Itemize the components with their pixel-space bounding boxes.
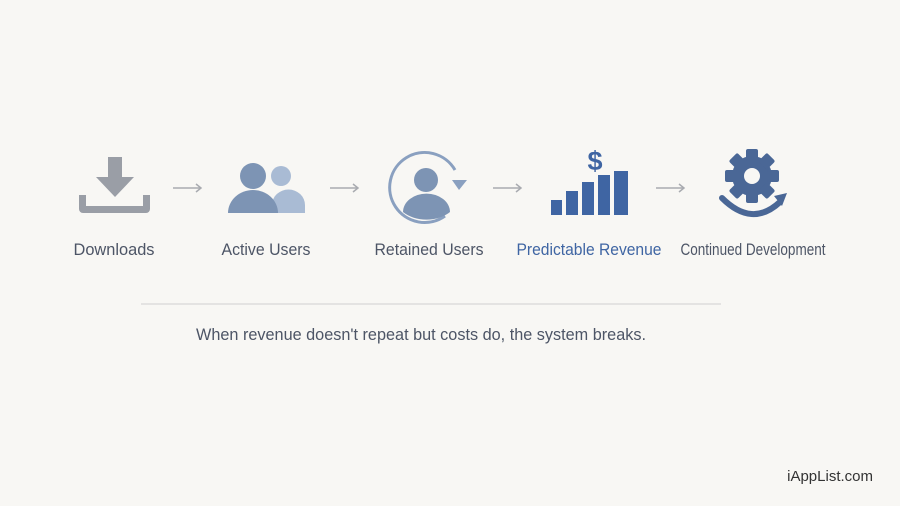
- labels: Downloads: [74, 240, 154, 259]
- arrow 3: [493, 184, 521, 192]
- icon: gear: [722, 149, 787, 214]
- watermark: iAppList.com: [787, 468, 873, 485]
- arrow 2: [330, 184, 358, 192]
- icon: revenue chart: $: [587, 146, 603, 176]
- labels: Continued Development: [680, 240, 826, 259]
- icon: active users: [228, 163, 305, 213]
- icon: download: [79, 157, 150, 213]
- labels: [74, 240, 826, 259]
- labels: Predictable Revenue: [516, 240, 662, 259]
- icon: retained users: [390, 152, 467, 222]
- labels: Retained Users: [374, 240, 484, 259]
- labels: Active Users: [222, 240, 310, 259]
- arrow 4: [656, 184, 684, 192]
- caption: When revenue doesn't repeat but costs do, the system breaks.: [196, 325, 646, 344]
- icon: revenue chart: [551, 146, 628, 215]
- arrow 1: [173, 184, 201, 192]
